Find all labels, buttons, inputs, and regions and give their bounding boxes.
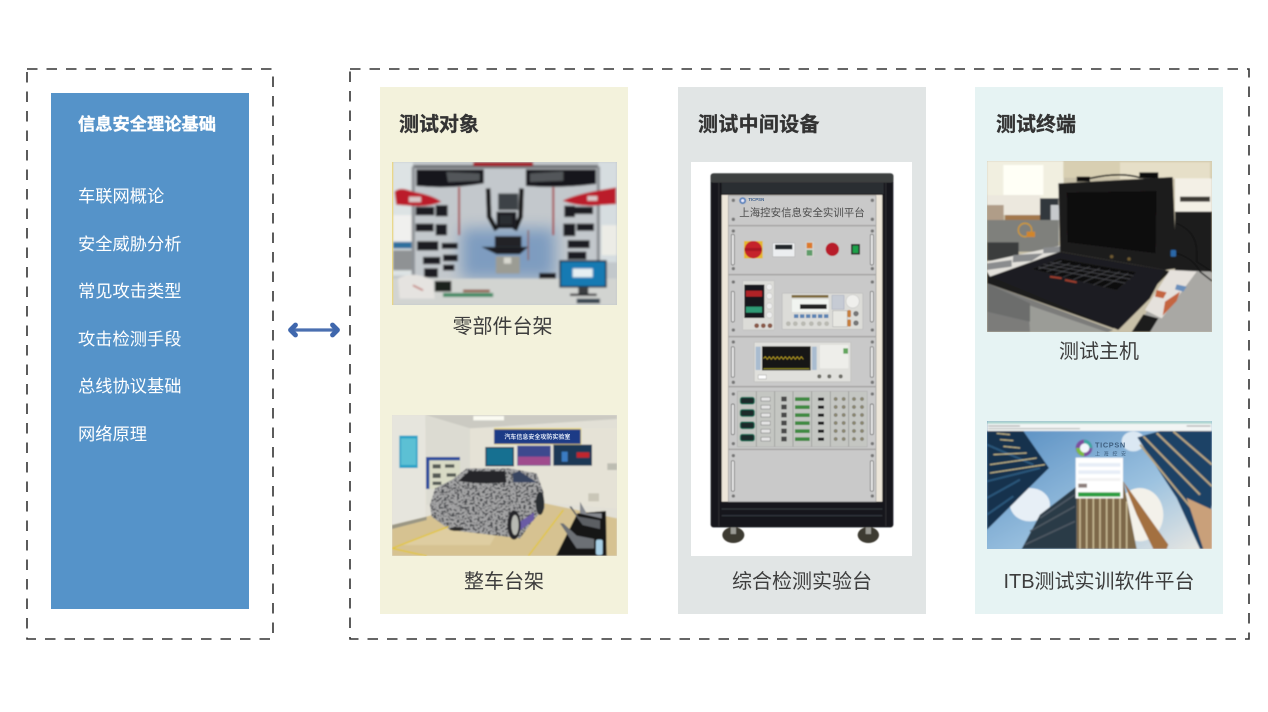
heading: theory: 信息安全理论基础 bbox=[78, 114, 216, 134]
signal generator bbox=[782, 293, 863, 329]
list item: 常见攻击类型 bbox=[78, 281, 182, 301]
photo: whole vehicle bench: 汽车信息安全攻防实验室 bbox=[504, 433, 570, 441]
screenshot: ITB login page bbox=[987, 421, 1212, 549]
panel: test terminals background bbox=[975, 87, 1223, 614]
arrow: bidirectional bbox=[288, 322, 340, 338]
panel: information security theory bbox=[51, 93, 249, 609]
photo: integrated test cabinet: 上海控安信息安全实训平台 bbox=[739, 206, 865, 219]
power supply bbox=[743, 281, 774, 330]
dashed frame: theory bbox=[26, 68, 274, 640]
photo: integrated test cabinet bbox=[691, 162, 912, 556]
list item: 车联网概论 bbox=[78, 186, 164, 206]
handles bbox=[731, 234, 873, 491]
heading: test objects: 测试对象 bbox=[399, 114, 479, 136]
photo: whole vehicle bench bbox=[392, 415, 617, 556]
screenshot: ITB login page: TICPSN bbox=[1095, 441, 1126, 450]
panel: test objects background bbox=[380, 87, 628, 614]
heading: test terminals: 测试终端 bbox=[996, 114, 1076, 136]
connector plates bbox=[737, 391, 867, 447]
caption: test host: 测试主机 bbox=[1059, 341, 1139, 363]
caption: integrated test cabinet: 综合检测实验台 bbox=[732, 571, 872, 593]
heading: intermediate equipment: 测试中间设备 bbox=[698, 114, 820, 136]
list item: 网络原理 bbox=[78, 424, 147, 444]
photo: integrated test cabinet: TICPSN bbox=[748, 197, 764, 202]
list item: 安全威胁分析 bbox=[78, 234, 182, 254]
caption: whole vehicle bench: 整车台架 bbox=[464, 571, 544, 593]
photo: component rack bbox=[392, 162, 617, 305]
feet bbox=[722, 527, 744, 543]
dashed frame: test platform bbox=[349, 68, 1250, 640]
oscilloscope bbox=[754, 342, 851, 382]
panel: intermediate equipment background bbox=[678, 87, 926, 614]
caption: ITB software platform: ITB测试实训软件平台 bbox=[1003, 571, 1195, 593]
list item: 总线协议基础 bbox=[78, 376, 182, 396]
list item: 攻击检测手段 bbox=[78, 328, 182, 348]
switches bbox=[744, 241, 763, 258]
photo: test host laptop bbox=[987, 161, 1212, 332]
caption: component rack: 零部件台架 bbox=[452, 316, 552, 338]
screenshot: ITB login page: 上海控安 bbox=[1095, 450, 1130, 457]
